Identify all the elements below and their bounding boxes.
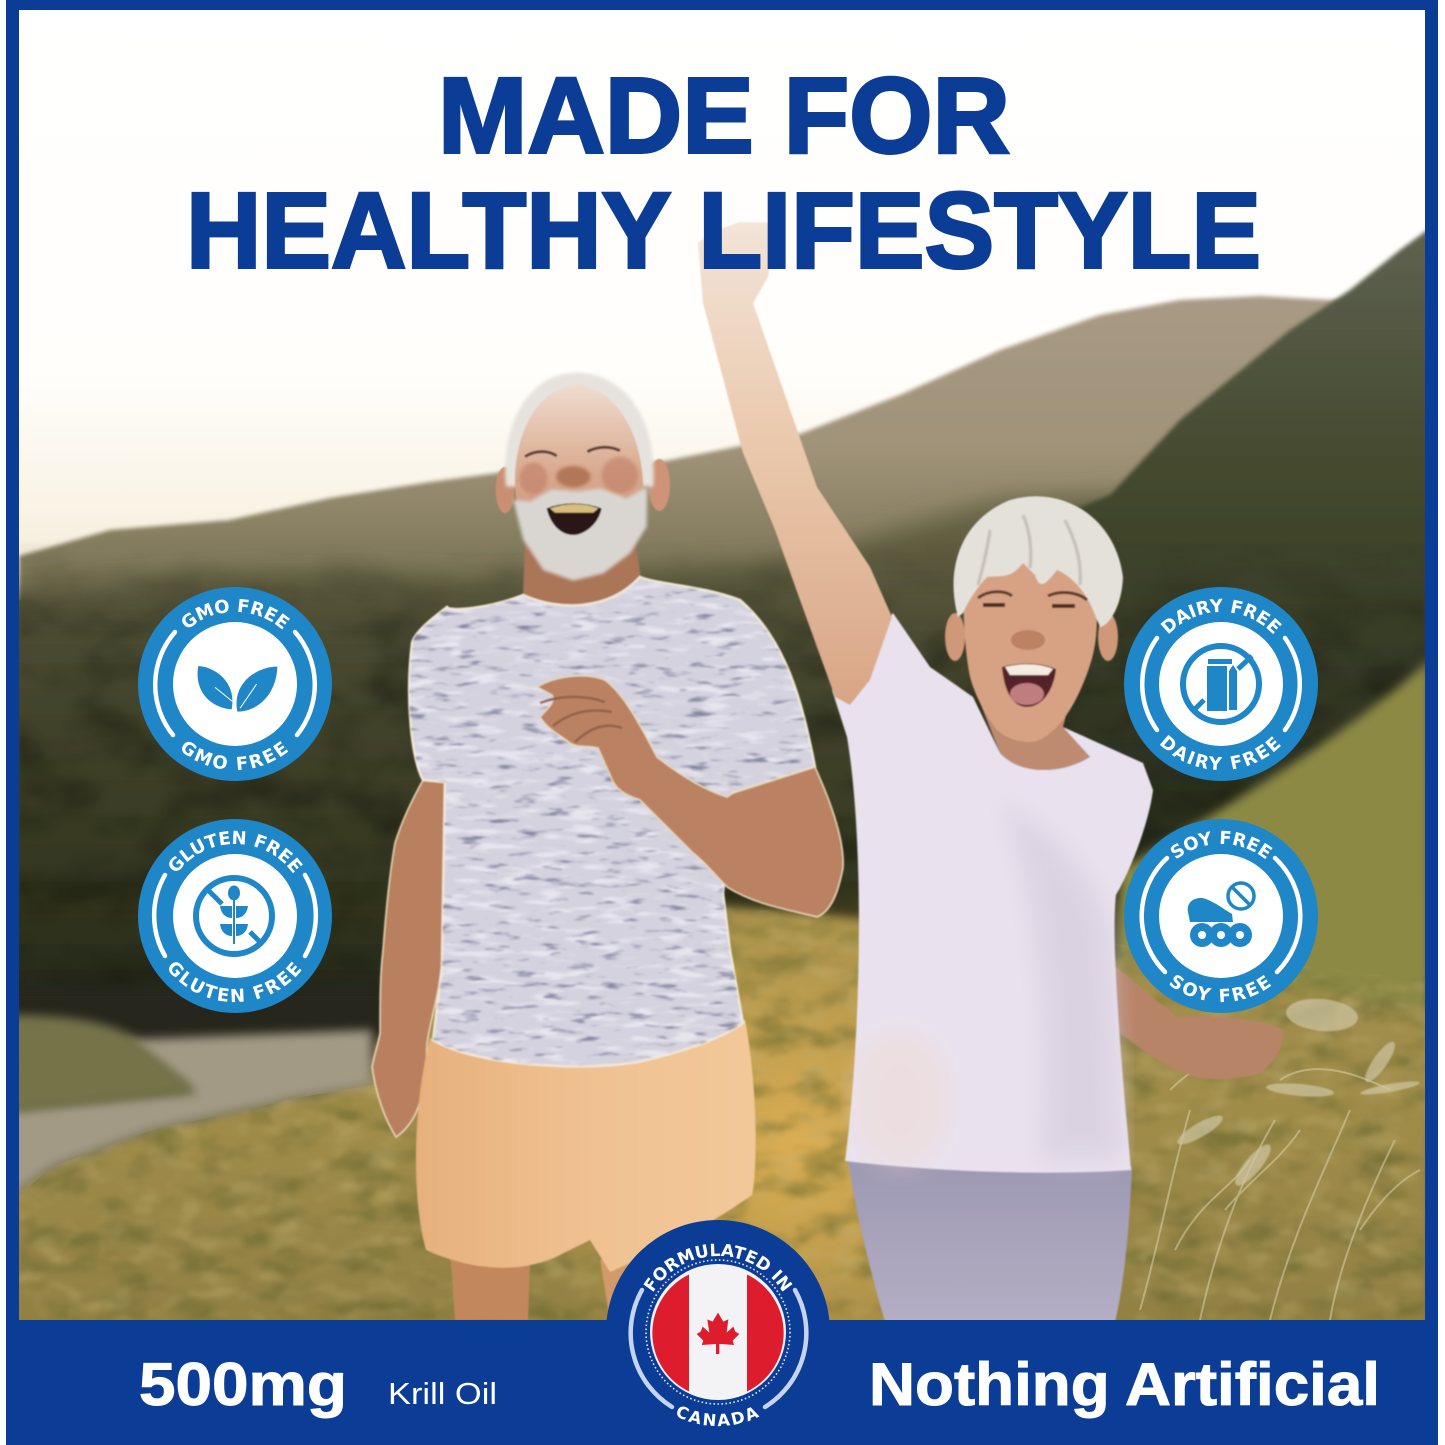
man's shorts	[416, 1020, 756, 1272]
grass mottling, dark	[19, 905, 1425, 1320]
hair	[505, 373, 654, 487]
man's fingers	[540, 697, 622, 742]
woman	[698, 222, 1283, 1322]
misty road and rocks	[10, 1030, 372, 1196]
warm glow on shirt	[850, 1030, 950, 1170]
badge: gluten free	[138, 819, 332, 1013]
ears	[496, 467, 514, 513]
grassy verge, left	[10, 1015, 196, 1112]
label top: GLUTEN FREE	[169, 830, 303, 874]
man's arm, left of image	[372, 780, 445, 1137]
label top: FORMULATED IN	[643, 1244, 792, 1292]
badge: formulated in Canada	[606, 1220, 830, 1426]
icon: leaves	[198, 666, 277, 712]
face	[514, 385, 644, 504]
dose: 500mg krill oil	[139, 1351, 497, 1418]
woman's lowered arm and hand	[1107, 960, 1283, 1079]
nose	[1011, 630, 1045, 650]
title	[186, 54, 1261, 290]
hazy far mountain	[19, 293, 1340, 600]
man's head	[496, 373, 670, 581]
mouth	[547, 503, 602, 535]
label top: DAIRY FREE	[1160, 598, 1282, 634]
cheeks	[519, 462, 547, 494]
woman's neck and chest	[975, 690, 1090, 770]
mouth	[1002, 663, 1056, 707]
label bottom: CANADA	[677, 1406, 760, 1426]
man's bent arm and hand	[537, 676, 843, 917]
man's neck	[523, 540, 642, 607]
badge: soy free	[1124, 819, 1318, 1013]
dark trees, right	[1064, 228, 1425, 898]
woman's ears	[945, 613, 965, 661]
nothing artificial: Nothing Artificial	[869, 1351, 1380, 1418]
icon: crossed wheat	[196, 878, 272, 954]
label bottom: SOY FREE	[1170, 975, 1272, 1002]
eyes and brows	[525, 447, 620, 457]
hair strands	[978, 515, 1080, 585]
golden sunlit meadow	[576, 895, 884, 1320]
man's marl t-shirt	[409, 577, 815, 1066]
teeth	[1005, 664, 1053, 675]
label top: GMO FREE	[182, 598, 290, 630]
label bottom: GMO FREE	[182, 741, 288, 770]
500mg: 500mg	[139, 1351, 347, 1418]
meadow	[0, 905, 1430, 1340]
badge: GMO free	[138, 587, 332, 781]
forest mottling	[19, 564, 1406, 980]
dark forest hill	[19, 484, 1122, 1060]
nose	[556, 466, 591, 487]
label bottom: DAIRY FREE	[1160, 734, 1281, 770]
krill oil: Krill Oil	[388, 1376, 497, 1411]
man's far leg	[450, 1259, 530, 1320]
pale seed heads	[1174, 996, 1420, 1190]
title line 2: HEALTHY LIFESTYLE	[186, 170, 1261, 290]
woman's raised arm	[698, 222, 892, 705]
scene base tone	[19, 600, 1425, 1320]
shirt shading	[1000, 800, 1122, 1160]
eye shadows	[983, 605, 1075, 606]
sky	[19, 10, 1425, 610]
tongue	[1010, 683, 1044, 705]
title line 1: MADE FOR	[438, 54, 1010, 176]
icon: Canadian flag disc	[650, 1264, 786, 1400]
man's near leg	[600, 1259, 630, 1312]
woman's face	[963, 560, 1097, 742]
grassy slope, right	[1114, 658, 1425, 1062]
woman's jeans	[848, 1160, 1132, 1322]
badge: dairy free	[1124, 587, 1318, 781]
grass mottling, light	[19, 905, 1425, 1320]
eyes and brows	[978, 592, 1087, 600]
woman's white t-shirt	[832, 613, 1153, 1173]
bottom blue band	[6, 1320, 1438, 1445]
woman's hair	[954, 496, 1123, 627]
label bottom: GLUTEN FREE	[169, 962, 302, 1002]
meadow grass stems	[1140, 1040, 1420, 1320]
teeth	[550, 504, 598, 513]
man	[372, 373, 843, 1320]
icon: crossed soybeans	[1188, 883, 1254, 947]
label top: SOY FREE	[1170, 830, 1272, 859]
beard	[513, 487, 647, 581]
icon: crossed milk carton	[1183, 646, 1259, 722]
tree line above road	[63, 996, 380, 1044]
